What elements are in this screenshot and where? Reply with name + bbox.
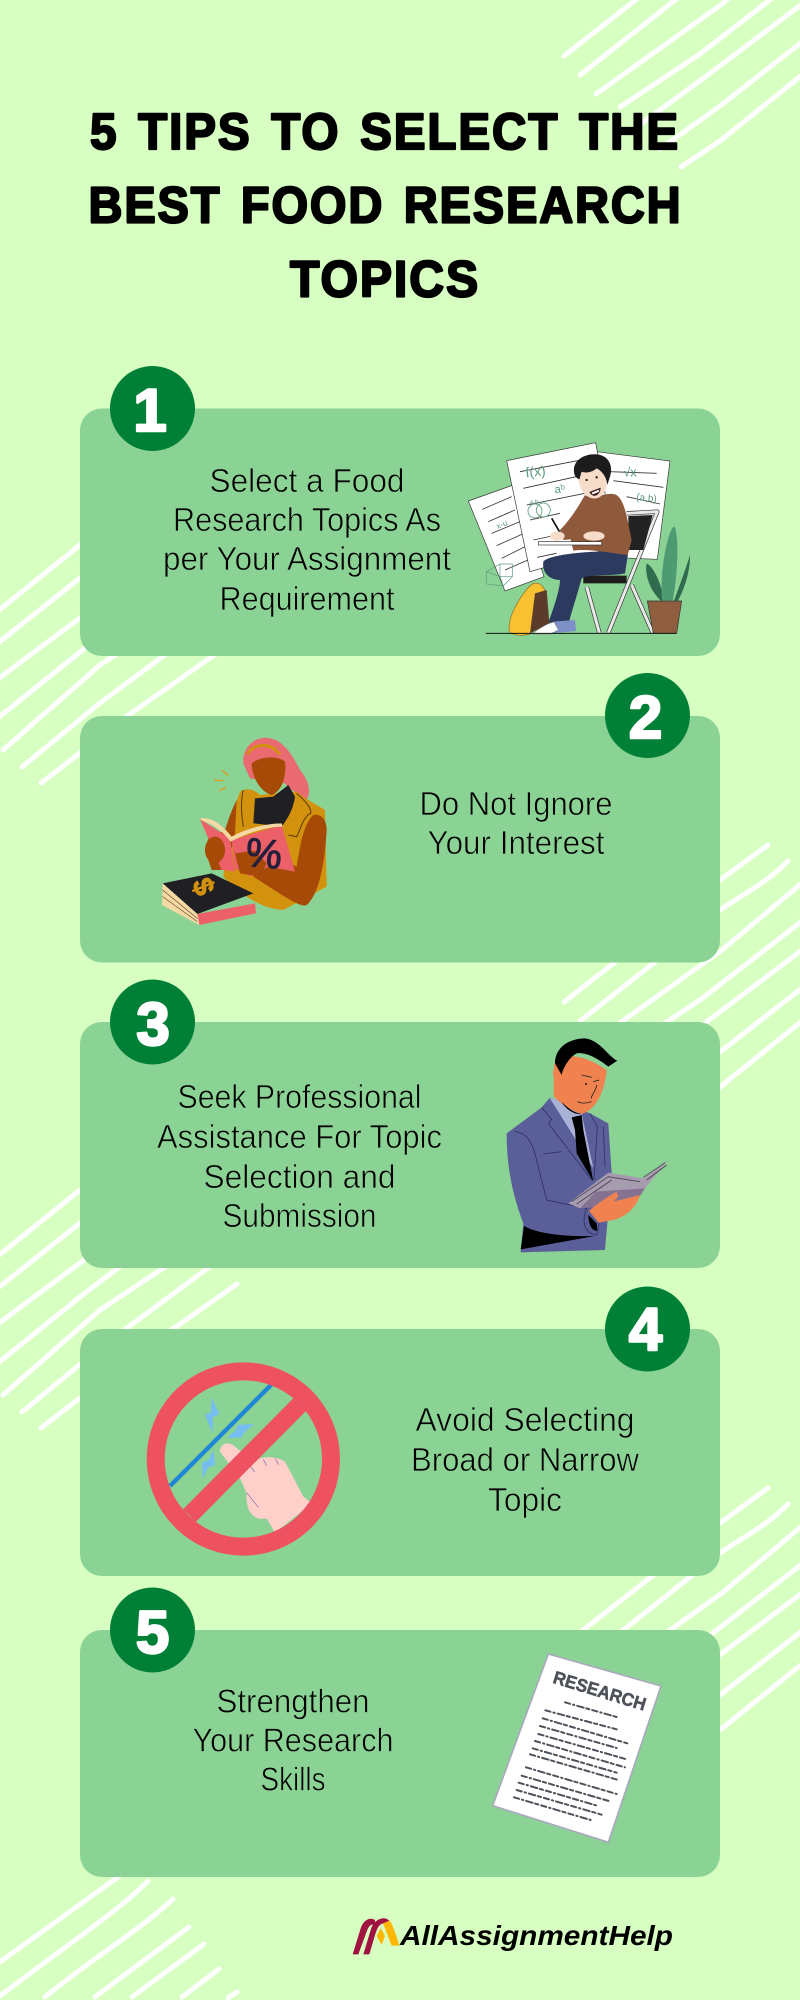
icon: prohibition sign over hand	[156, 1371, 331, 1547]
number badge 3	[110, 980, 195, 1064]
panel 2 background	[80, 716, 720, 962]
title: TOPICS	[290, 250, 480, 308]
tip 3 text: Assistance For Topic	[157, 1118, 442, 1155]
logo wordmark: AllAssignmentHelp	[399, 1920, 673, 1951]
icon: student writing among papers: aᵇ	[554, 483, 566, 496]
tip 3 text: Selection and	[204, 1158, 396, 1195]
panel: tip 4	[80, 1286, 720, 1576]
tip 4 text: Broad or Narrow	[411, 1441, 639, 1478]
number badge 2: 2	[629, 684, 662, 751]
icon: student writing among papers	[468, 443, 690, 635]
title: BEST FOOD RESEARCH	[88, 176, 682, 234]
tip 3 text: Submission	[222, 1197, 376, 1234]
panel: tip 1	[80, 366, 720, 656]
number badge 5	[110, 1588, 195, 1672]
icon: research paper: RESEARCH	[551, 1667, 648, 1715]
tip 5 text: Skills	[260, 1760, 326, 1798]
icon: research paper	[493, 1654, 661, 1842]
icon: woman reading a book: %	[244, 829, 284, 878]
number badge 3: 3	[136, 991, 170, 1058]
tip 1 text: Requirement	[220, 580, 394, 617]
icon: student writing among papers: f(x)	[525, 462, 546, 480]
number badge 1: 1	[133, 377, 167, 444]
panel: tip 3	[80, 980, 720, 1268]
panel 4 background	[80, 1329, 720, 1576]
tip 3 text	[157, 1078, 442, 1234]
logo: AllAssignmentHelp	[353, 1918, 673, 1954]
logo mark	[353, 1918, 399, 1954]
tip 5 text: Strengthen	[216, 1682, 370, 1720]
panel 5 background	[80, 1630, 720, 1877]
tip 5 text: Your Research	[192, 1722, 394, 1758]
panel: tip 2	[80, 673, 720, 962]
tip 4 text: Topic	[488, 1481, 562, 1518]
tip 1 text: per Your Assignment	[163, 540, 451, 577]
tip 1 text: Research Topics As	[173, 501, 441, 538]
tip 2 text: Do Not Ignore	[420, 785, 612, 822]
title: 5 TIPS TO SELECT THE	[90, 103, 680, 160]
tip 1 text: Select a Food	[210, 462, 404, 499]
tip 1 text	[163, 462, 451, 617]
icon: student writing among papers: x-u	[495, 518, 509, 531]
tip 5 text	[192, 1682, 394, 1798]
number badge 2	[605, 673, 690, 758]
tip 2 text	[420, 785, 612, 861]
number badge 1	[110, 366, 195, 451]
icon: woman reading a book	[162, 738, 327, 925]
tip 4 text: Avoid Selecting	[416, 1401, 634, 1438]
tip 3 text: Seek Professional	[178, 1078, 422, 1115]
icon: man in suit reading	[507, 1038, 668, 1252]
panel 3 background	[80, 1022, 720, 1268]
icon: student writing among papers: (a,b)	[636, 492, 657, 505]
icon: student writing among papers: √x	[623, 466, 637, 480]
panel 1 background	[80, 408, 720, 656]
panel: tip 5	[80, 1588, 720, 1877]
number badge 5: 5	[136, 1599, 169, 1666]
icon: woman reading a book: $	[186, 874, 221, 900]
icon: student writing among papers: a b	[529, 499, 539, 506]
number badge 4	[605, 1286, 690, 1372]
tip 2 text: Your Interest	[428, 824, 604, 861]
title	[88, 103, 682, 308]
number badge 4: 4	[629, 1296, 663, 1363]
tip 4 text	[411, 1401, 639, 1518]
